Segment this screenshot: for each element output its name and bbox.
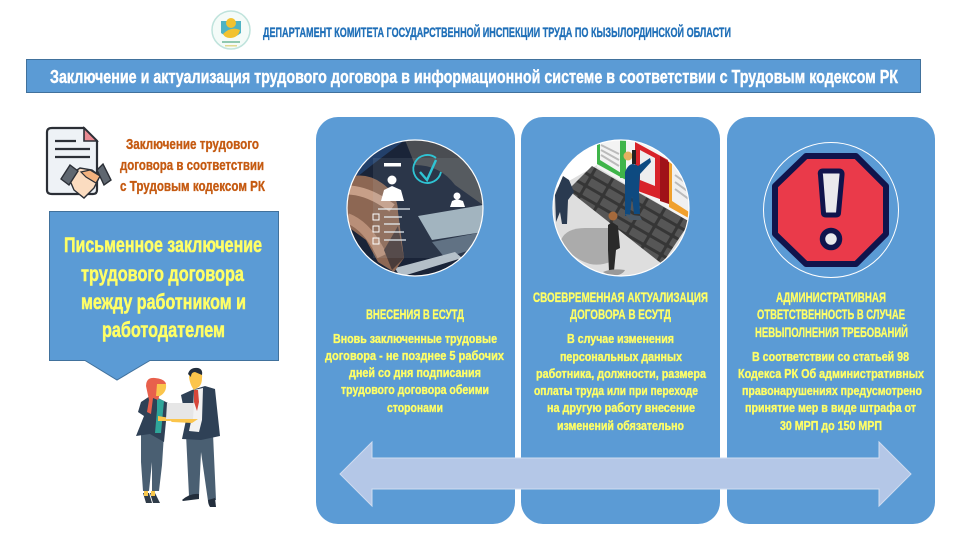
body text: Вновь заключенные трудовые <box>333 331 497 346</box>
panel: entry into ESUTD <box>316 117 515 524</box>
subheading: contract conclusion: договора в соответствии <box>120 157 264 174</box>
illustration: two colleagues with laptop <box>136 368 220 507</box>
subheading: contract conclusion: Заключение трудового <box>126 136 259 153</box>
callout: written contract: Письменное заключение <box>64 234 262 257</box>
callout: written contract: трудового договора <box>81 263 244 286</box>
body text: персональных данных <box>560 349 683 364</box>
body text: договора - не позднее 5 рабочих <box>325 348 505 363</box>
body text: работника, должности, размера <box>536 366 707 381</box>
icon: contract with handshake <box>47 128 111 198</box>
heading: АДМИНИСТРАТИВНАЯ <box>776 290 886 305</box>
body text: оплаты труда или при переходе <box>534 383 698 398</box>
subheading: contract conclusion: с Трудовым кодексом РК <box>120 178 266 195</box>
icon: stop sign with exclamation mark <box>764 142 898 278</box>
callout: written contract: работодателем <box>102 319 225 342</box>
title banner <box>26 60 920 92</box>
body text <box>534 331 707 433</box>
photo: digital HR checklist <box>347 140 483 277</box>
body text: Кодекса РК Об административных <box>738 366 925 381</box>
body text: В соответствии со статьей 98 <box>752 349 909 364</box>
body text: 30 МРП до 150 МРП <box>780 418 882 433</box>
heading <box>533 290 708 322</box>
body text: сторонами <box>387 400 443 415</box>
subheading: contract conclusion <box>120 136 266 195</box>
woman <box>136 378 170 503</box>
heading: ДОГОВОРА В ЕСУТД <box>570 307 671 322</box>
panel: timely update <box>521 117 720 524</box>
body text: В случае изменения <box>567 331 674 346</box>
photo: people at information boards <box>553 140 692 276</box>
body text: трудового договора обеими <box>341 382 489 397</box>
body text <box>325 331 505 415</box>
man <box>181 368 220 507</box>
heading: ВНЕСЕНИЯ В ЕСУТД <box>366 307 464 322</box>
body text: правонарушениях предусмотрено <box>742 383 922 398</box>
header: department logo <box>212 11 250 49</box>
panel: administrative liability <box>727 117 935 524</box>
body text: на другую работу внесение <box>547 400 695 415</box>
body text <box>738 349 925 433</box>
laptop <box>166 403 194 419</box>
body text: изменений обязательно <box>557 418 684 433</box>
body text: дней со дня подписания <box>349 365 481 380</box>
callout: written contract: между работником и <box>81 291 246 314</box>
callout: written contract <box>50 212 278 380</box>
body text: принятие мер в виде штрафа от <box>745 400 916 415</box>
arrow: double-headed across panels <box>340 442 911 506</box>
heading <box>755 290 908 340</box>
heading: СВОЕВРЕМЕННАЯ АКТУАЛИЗАЦИЯ <box>533 290 708 305</box>
